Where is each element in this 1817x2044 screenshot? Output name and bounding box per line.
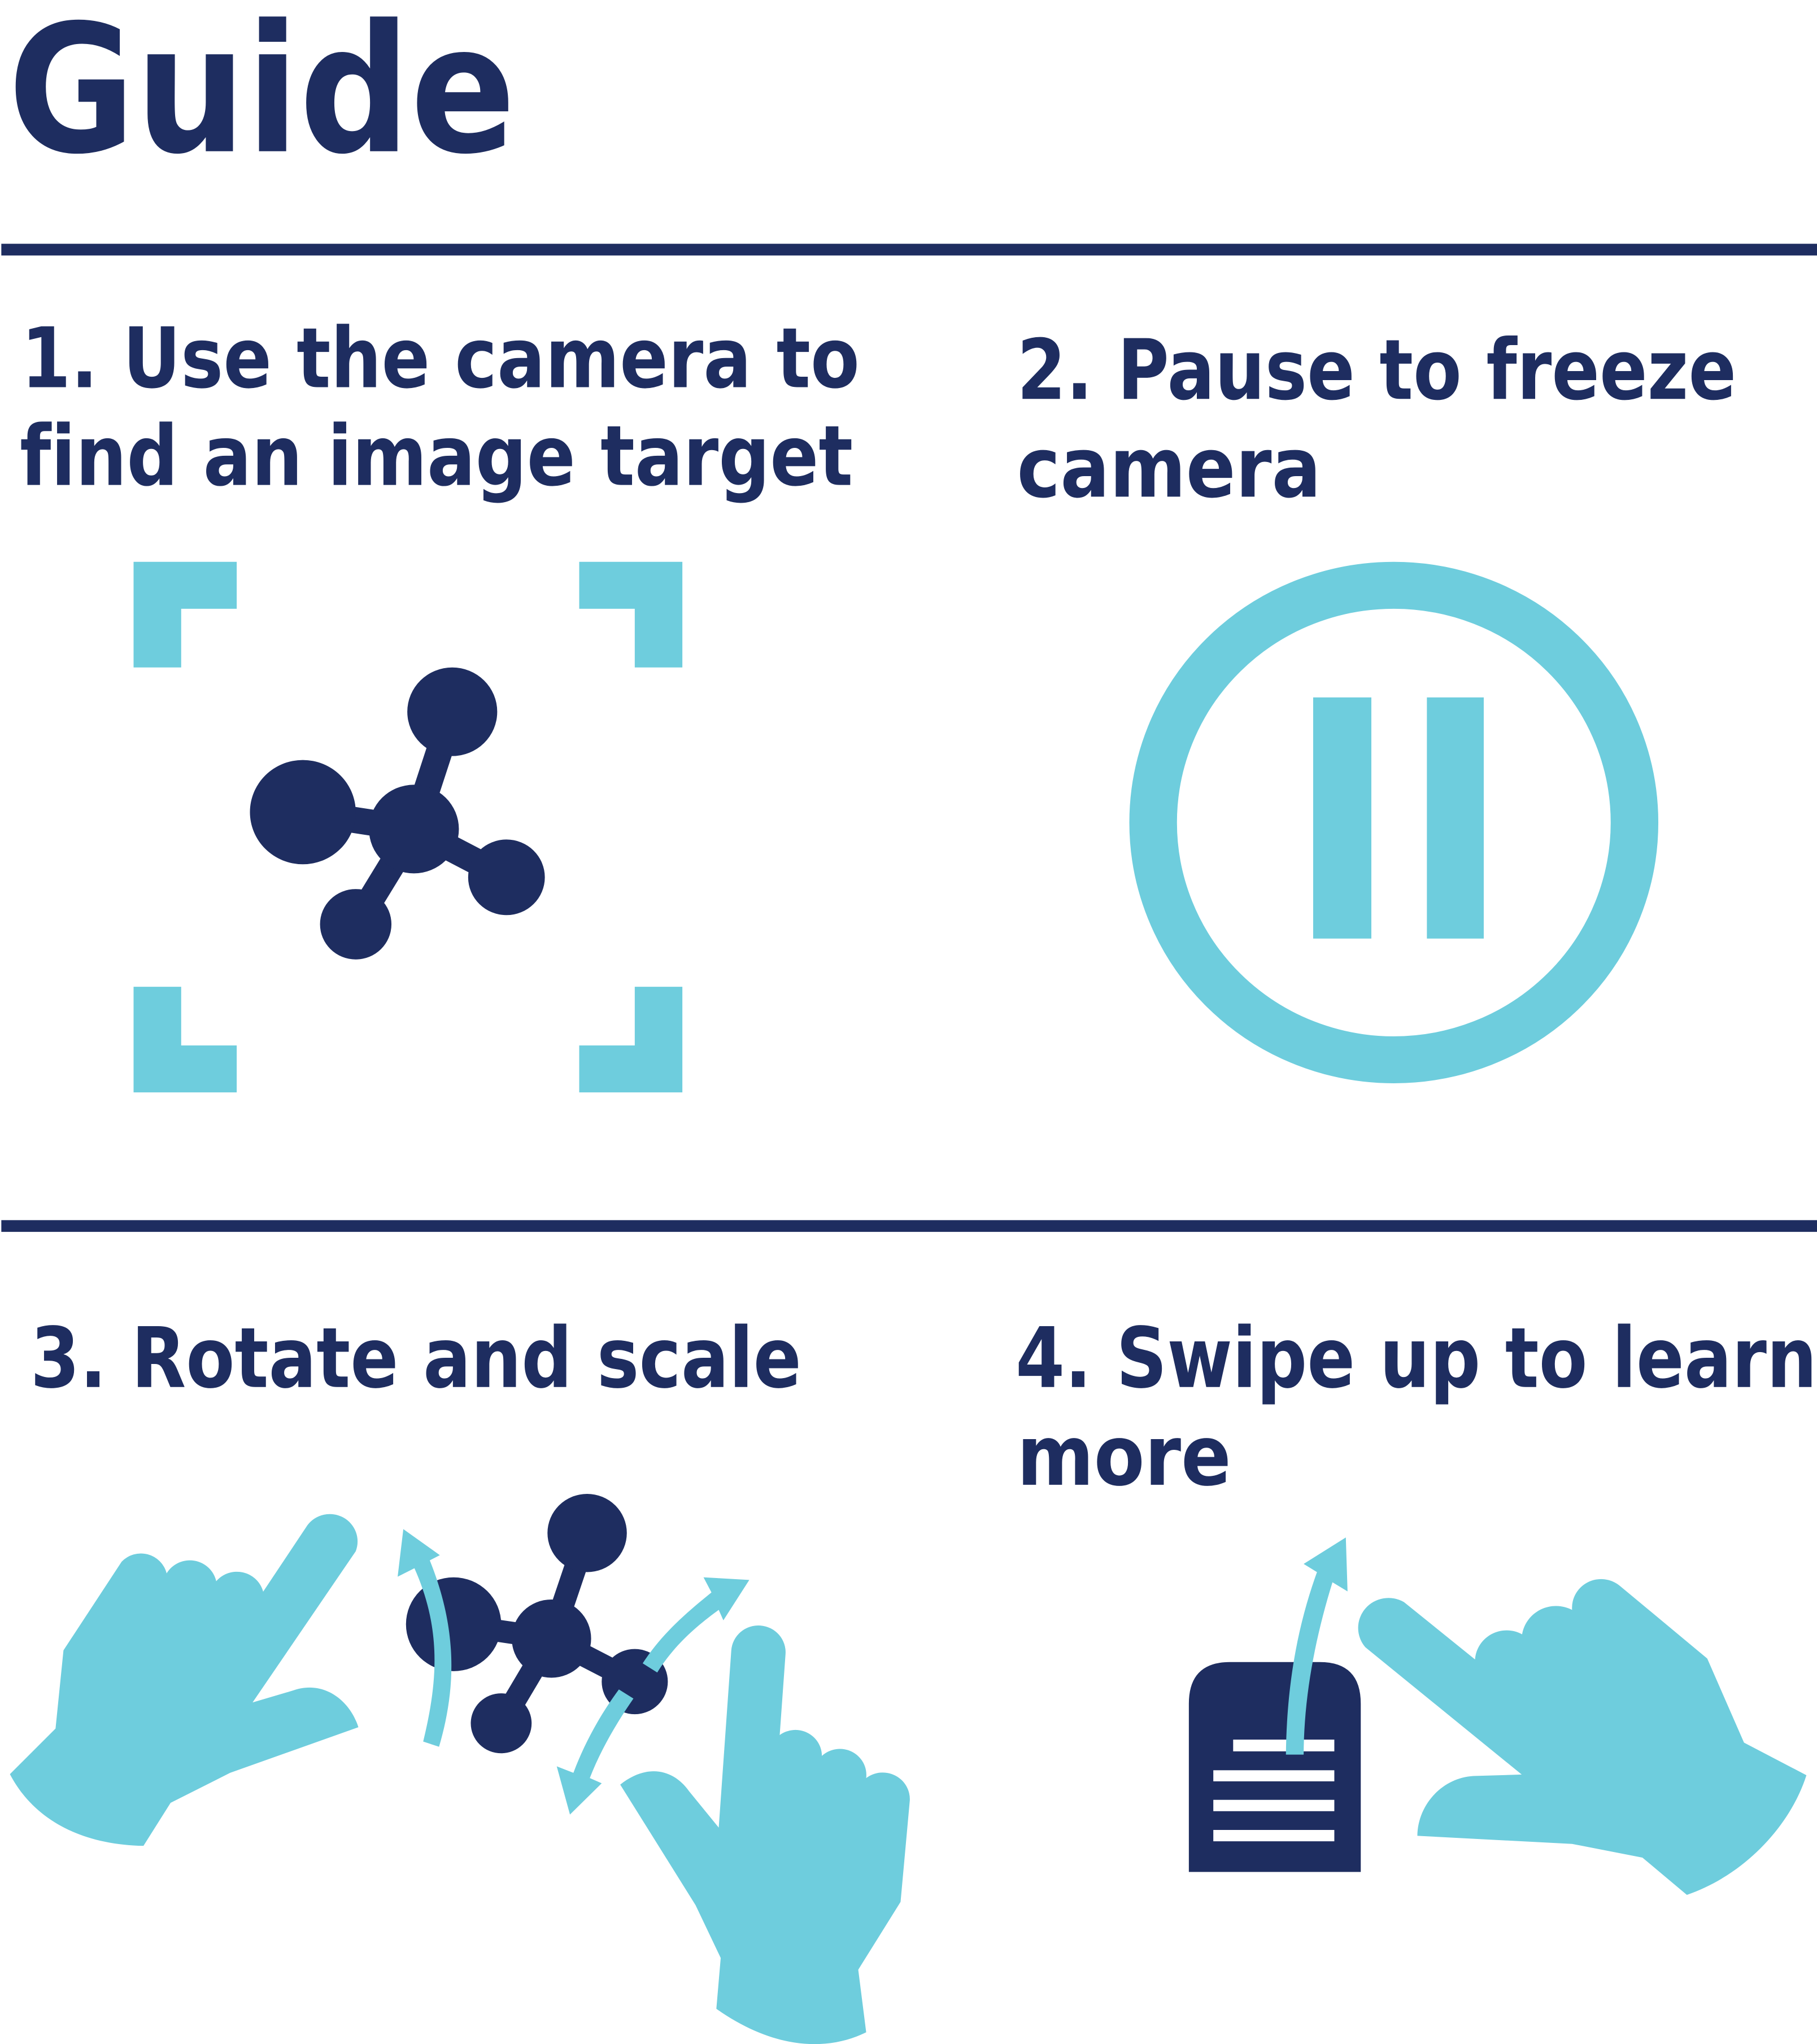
heading: step 4 (1016, 1310, 1817, 1505)
icon: molecule (406, 1494, 668, 1753)
heading: step 4: more (1017, 1408, 1231, 1505)
icon: molecule (250, 668, 545, 960)
heading: step 1 (20, 310, 860, 505)
arrow: scale up (643, 1577, 750, 1672)
arrow: swipe up (1286, 1537, 1348, 1755)
icon: pause button (1153, 585, 1635, 1060)
heading: step 2 (1017, 322, 1736, 517)
arrow: scale down (557, 1689, 634, 1815)
icon: document (1189, 1662, 1361, 1872)
panel: step 1 (20, 310, 860, 1092)
icon: viewfinder corners (133, 562, 682, 1092)
heading: step 1: find an image target (20, 408, 853, 505)
icon: left hand (10, 1514, 359, 1846)
panel: step 2 (1017, 322, 1736, 1060)
heading: step 2: camera (1017, 420, 1321, 517)
icon: pointing hand (1358, 1579, 1806, 1895)
icon: right hand (620, 1625, 910, 2044)
heading: step 3: 3. Rotate and scale (30, 1310, 801, 1407)
heading: step 1: 1. Use the camera to (21, 310, 860, 407)
arrow: rotate (398, 1529, 451, 1747)
panel: step 4 (1016, 1310, 1817, 1895)
panel: step 3 (10, 1310, 910, 2044)
